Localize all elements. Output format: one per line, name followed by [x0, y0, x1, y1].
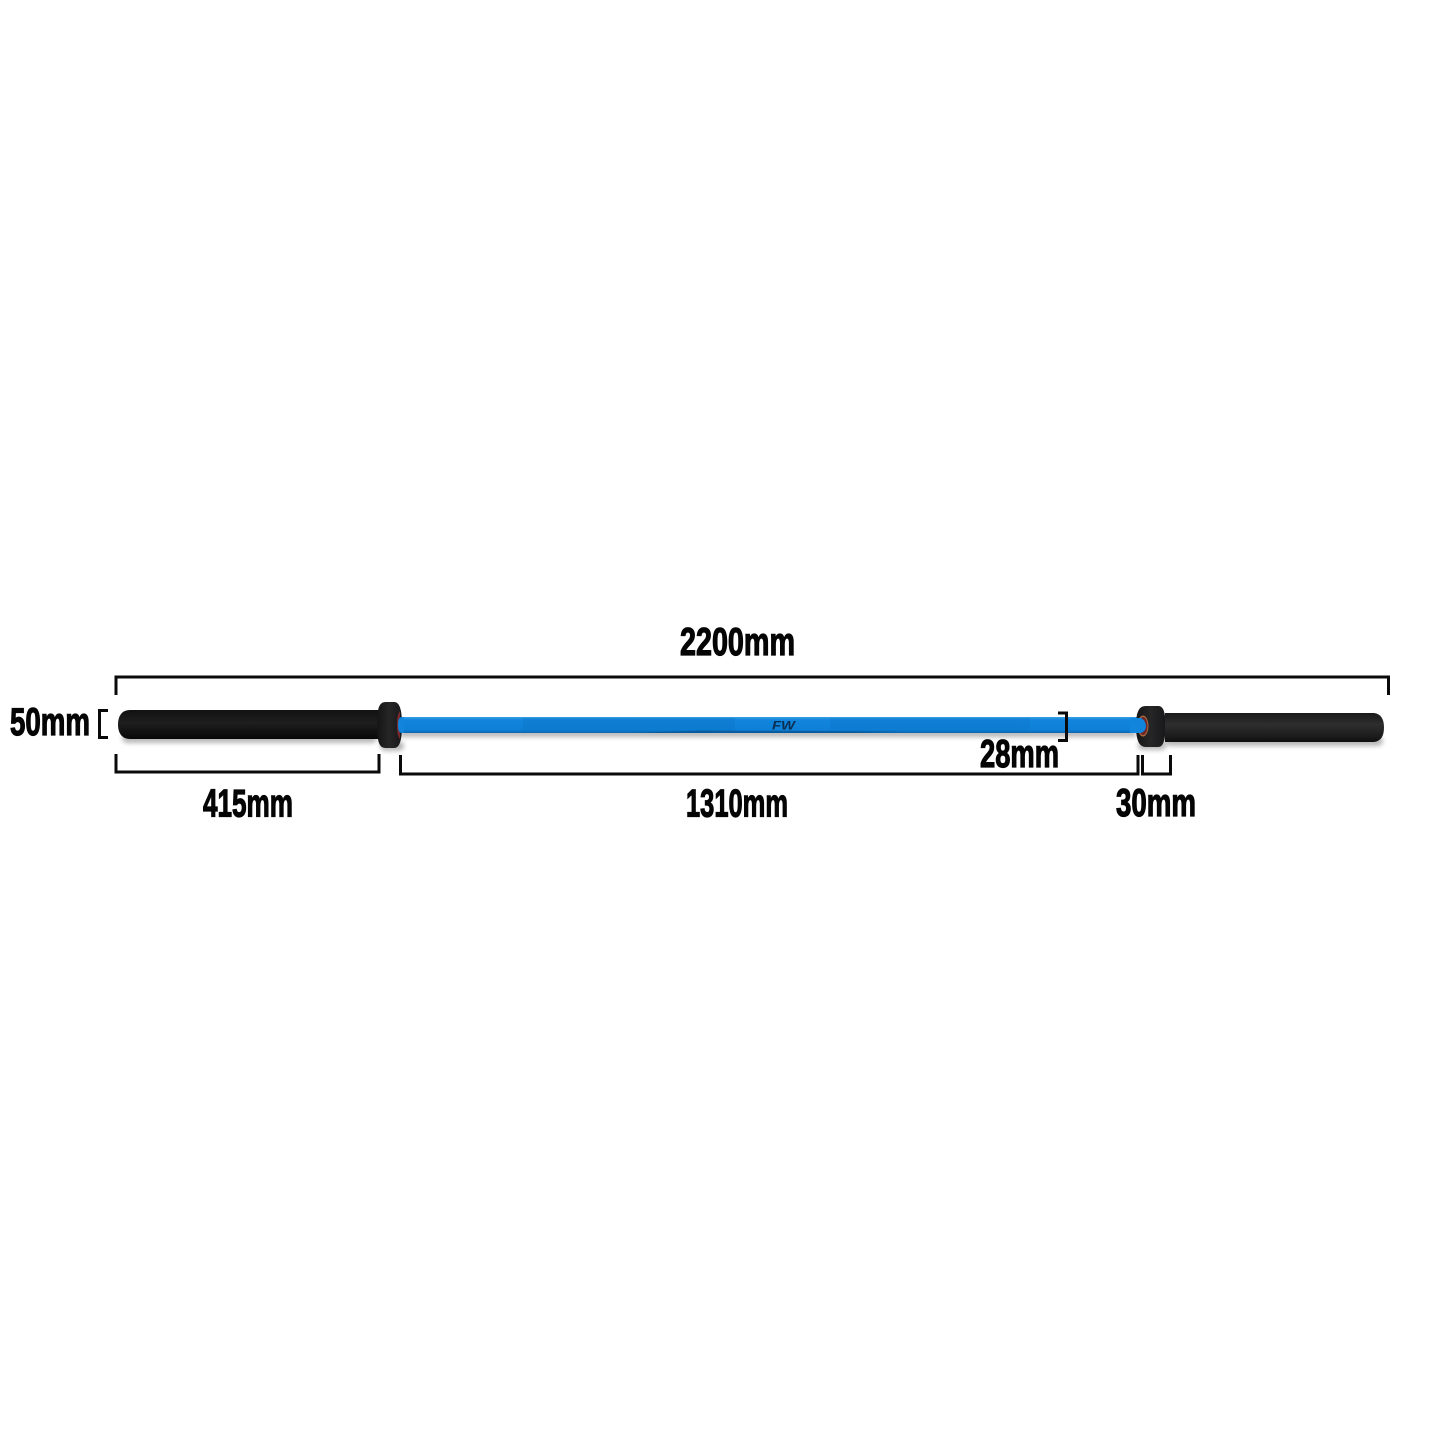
right sleeve — [1165, 713, 1384, 742]
barbell shadow — [122, 730, 1383, 751]
dimension: shaft diameter 28mm — [980, 713, 1066, 776]
dimension: overall length 2200mm — [116, 621, 1388, 695]
dimension: collar width 30mm: 30mm — [1116, 782, 1196, 825]
dimension: shaft length 1310mm — [400, 755, 1138, 826]
dimension: shaft length 1310mm: 1310mm — [686, 782, 788, 826]
dimension: overall length 2200mm: 2200mm — [680, 621, 795, 664]
dimension: sleeve length 415mm — [116, 754, 379, 826]
dimension: collar width 30mm — [1116, 755, 1196, 825]
blue shaft — [397, 717, 1140, 733]
left sleeve — [118, 710, 378, 739]
dimension: sleeve diameter 50mm: 50mm — [10, 701, 90, 744]
left collar — [377, 702, 404, 748]
right collar — [1130, 706, 1166, 747]
dimension: sleeve length 415mm: 415mm — [203, 782, 293, 826]
barbell — [118, 702, 1384, 751]
FW logo on shaft: FW — [772, 718, 797, 732]
dimension: shaft diameter 28mm: 28mm — [980, 733, 1059, 776]
